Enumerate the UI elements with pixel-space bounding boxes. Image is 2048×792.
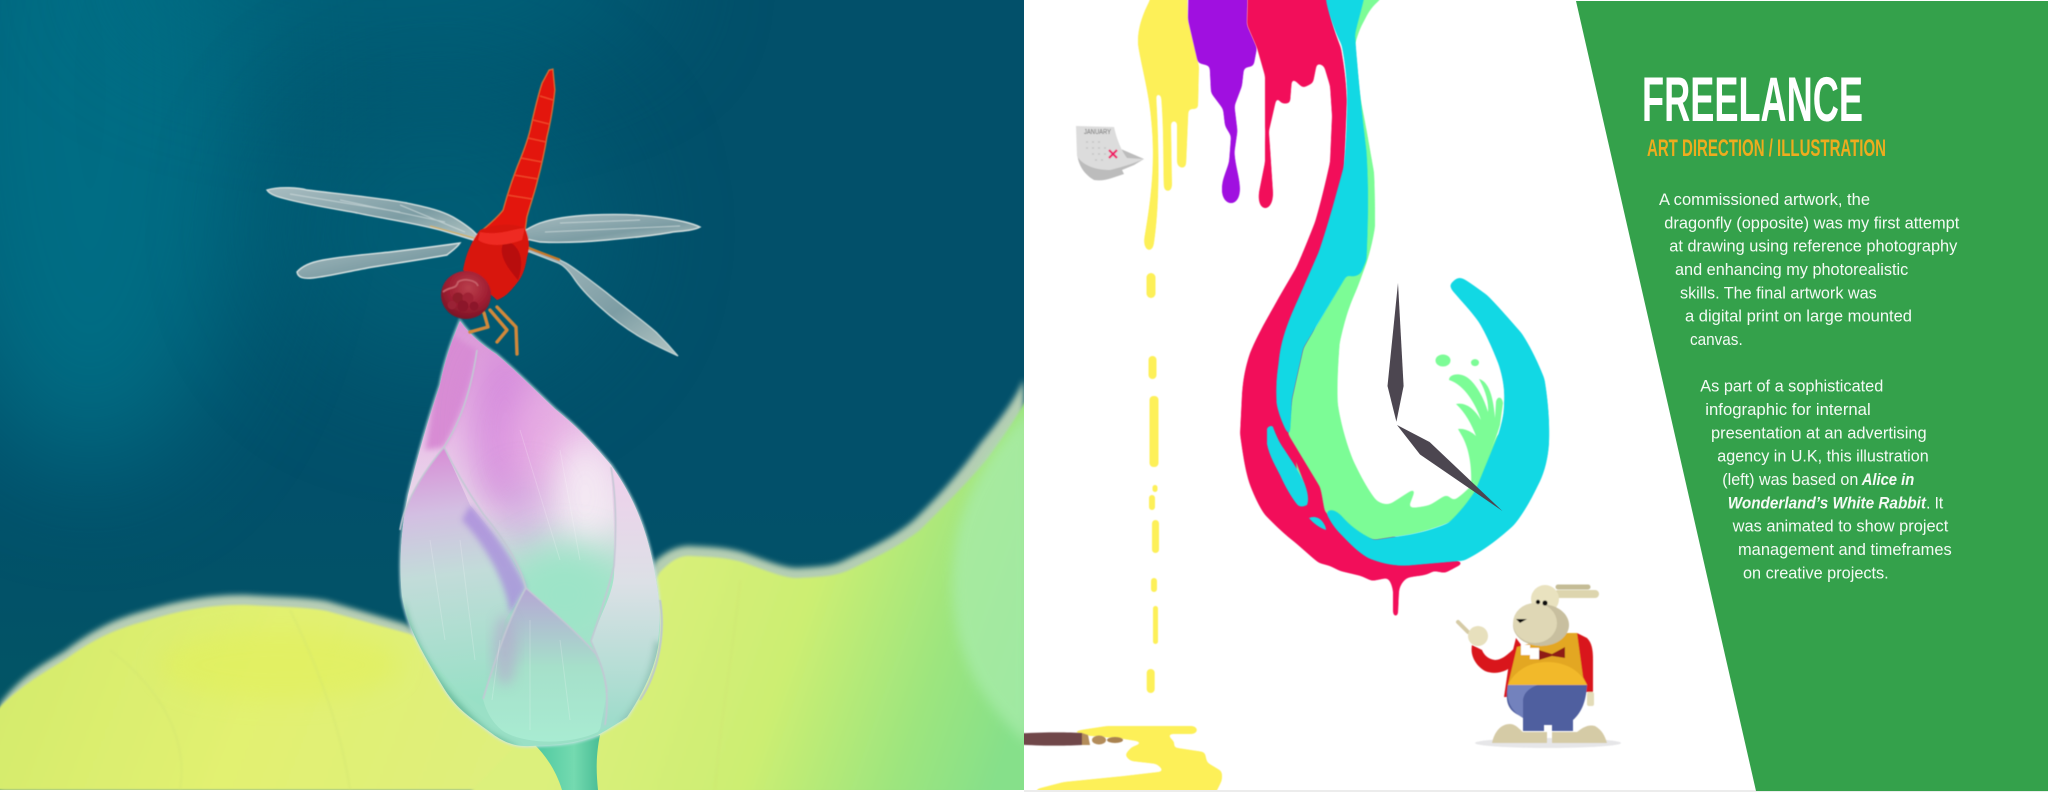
- calendar icon: JANUARY: [1084, 129, 1111, 136]
- text block: rabbit description: [1700, 378, 1952, 582]
- yellow paint pool: [1037, 727, 1221, 792]
- lotus stem: [535, 735, 600, 790]
- text block: dragonfly description: [1659, 191, 1960, 349]
- legs: [470, 307, 517, 354]
- text block: rabbit description: Alice in: [1861, 471, 1914, 489]
- dragonfly: [267, 69, 700, 356]
- cyan paint: lower swirl: [1326, 278, 1549, 566]
- cyan island in crimson: [1267, 426, 1326, 530]
- crimson paint flow: [1240, 0, 1464, 617]
- head: [441, 271, 491, 319]
- text block: rabbit description: infographic for internal: [1705, 401, 1871, 419]
- paint brush: [1010, 732, 1123, 746]
- text block: dragonfly description: and enhancing my photorealistic: [1675, 261, 1908, 279]
- green splash: [1436, 354, 1503, 486]
- calendar icon: [1076, 126, 1144, 180]
- text block: rabbit description: presentation at an advertising: [1711, 424, 1927, 442]
- lotus leaf: [0, 379, 1030, 792]
- text block: rabbit description: Wonderland’s White Rabbit: [1728, 494, 1927, 512]
- wing: upper right: [517, 214, 700, 242]
- text block: rabbit description: As part of a sophisticated: [1700, 378, 1883, 396]
- clock: minute hand: [1388, 283, 1404, 422]
- wing: upper left: [267, 188, 477, 240]
- thorax: [463, 225, 529, 300]
- cyan paint: upper stream: [1276, 0, 1368, 448]
- text block: rabbit description: agency in U.K, this illustration: [1717, 448, 1929, 466]
- panel: dragonfly painting: [0, 0, 1030, 792]
- text block: dragonfly description: canvas.: [1690, 331, 1743, 349]
- text block: dragonfly description: dragonfly (opposite) was my first attempt: [1664, 214, 1960, 232]
- text block: rabbit description: . It: [1926, 494, 1944, 512]
- wing: lower left: [297, 243, 460, 278]
- text block: dragonfly description: skills. The final artwork was: [1680, 284, 1877, 302]
- text block: rabbit description: (left) was based on: [1722, 471, 1858, 489]
- green paint flow: [1288, 0, 1510, 540]
- painting background: [0, 0, 1024, 790]
- wing: lower right: [522, 245, 678, 356]
- panel: green text panel: [1576, 1, 2048, 791]
- text block: rabbit description: management and timeframes: [1738, 541, 1952, 559]
- heading: FREELANCE: [1642, 65, 1863, 135]
- purple paint drip: [1188, 0, 1257, 203]
- panel: paint illustration: [1024, 0, 1621, 790]
- white rabbit character: [1458, 585, 1621, 748]
- text block: dragonfly description: at drawing using reference photography: [1669, 238, 1958, 256]
- text block: rabbit description: on creative projects.: [1743, 564, 1889, 582]
- text block: dragonfly description: a digital print on large mounted: [1685, 308, 1912, 326]
- clock: hour hand: [1397, 425, 1502, 511]
- subheading: ART DIRECTION / ILLUSTRATION: [1647, 135, 1886, 162]
- lotus bud: [390, 310, 670, 755]
- yellow paint drip: [1138, 0, 1199, 251]
- abdomen: [480, 69, 555, 232]
- text block: rabbit description: was animated to show project: [1732, 518, 1949, 536]
- falling yellow drops: [1146, 273, 1159, 693]
- text block: dragonfly description: A commissioned artwork, the: [1659, 191, 1870, 209]
